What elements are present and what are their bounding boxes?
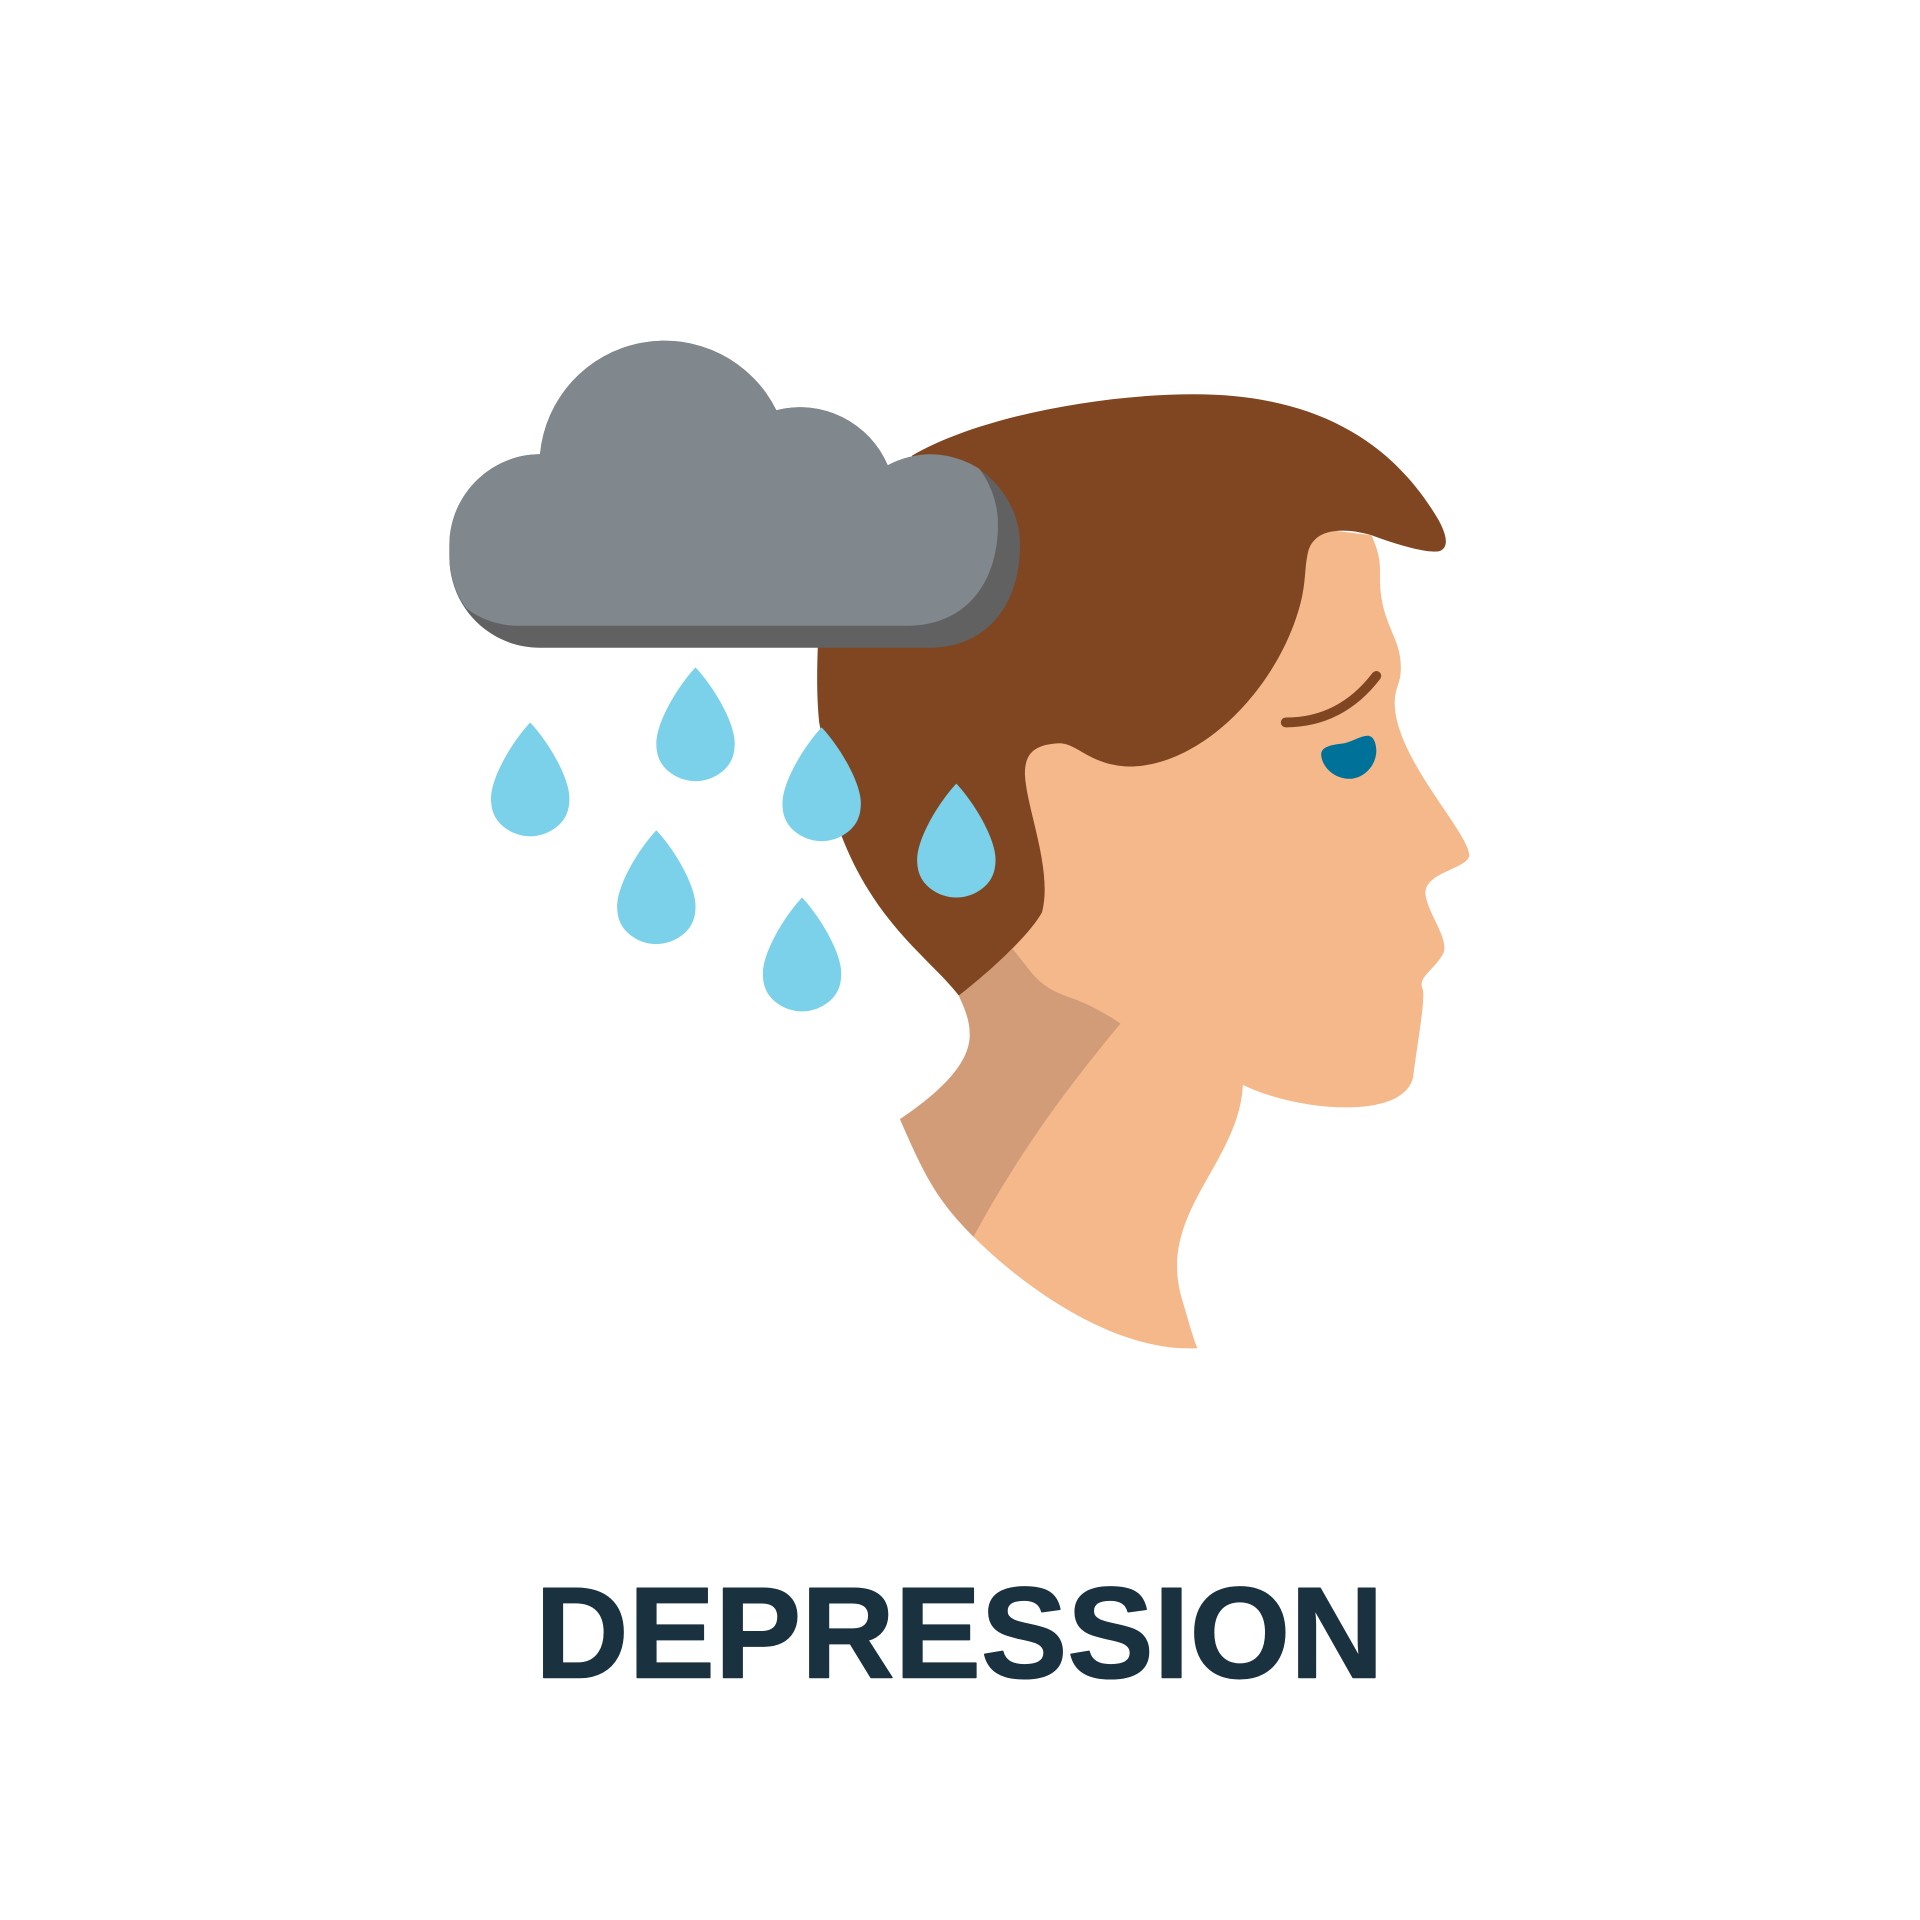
raindrop 4 bbox=[917, 784, 996, 898]
raindrops bbox=[491, 667, 996, 1011]
cloud shadow bbox=[449, 341, 1020, 648]
raindrop 1 bbox=[491, 722, 569, 836]
raindrop 6 bbox=[763, 898, 841, 1011]
hair bbox=[817, 394, 1446, 996]
rain cloud bbox=[449, 341, 1020, 648]
head figure bbox=[817, 394, 1469, 1348]
neck shadow bbox=[900, 949, 1120, 1237]
raindrop 2 bbox=[656, 667, 735, 781]
tear bbox=[1321, 736, 1376, 779]
raindrop 3 bbox=[782, 727, 861, 841]
title: DEPRESSION bbox=[535, 1561, 1384, 1706]
cloud body bbox=[449, 341, 998, 626]
raindrop 5 bbox=[617, 830, 696, 944]
eyebrow / closed eye bbox=[1286, 676, 1376, 722]
face and neck skin bbox=[900, 527, 1469, 1348]
